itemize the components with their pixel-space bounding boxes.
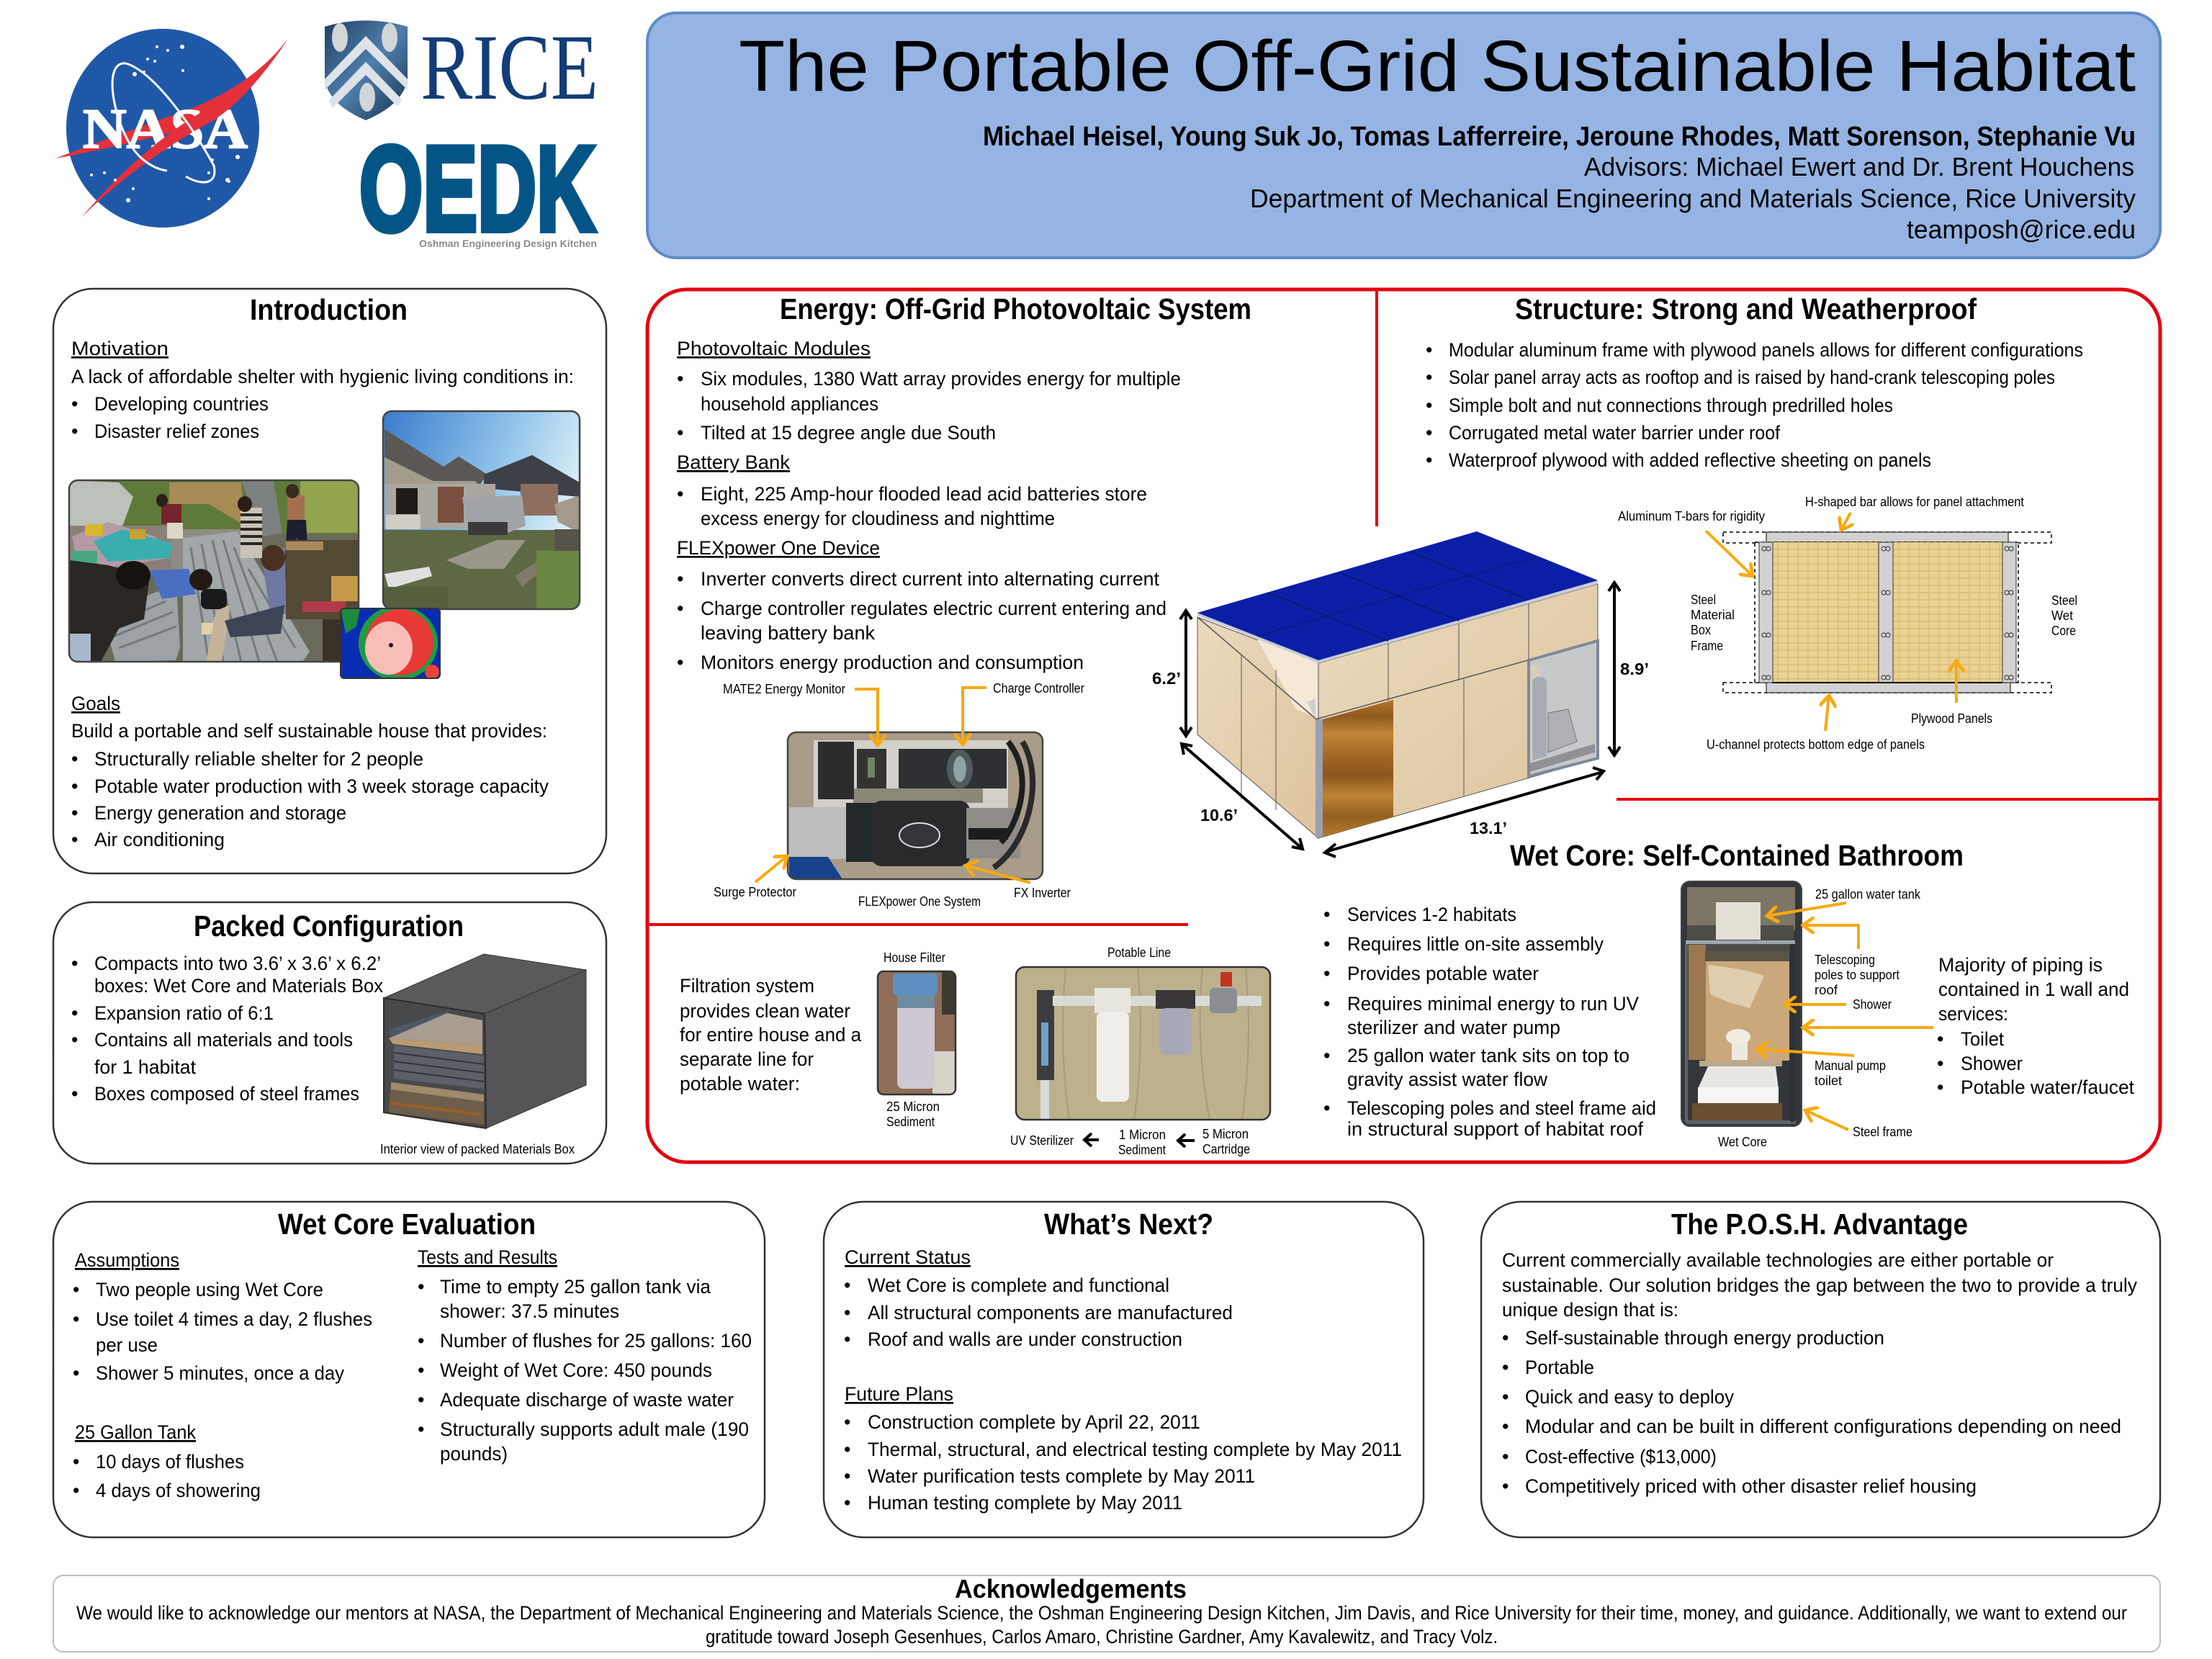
- future plans: •: [844, 1465, 850, 1487]
- structure bullets: Corrugated metal water barrier under roof: [1449, 422, 1780, 444]
- wet core callout labels: Steel frame: [1853, 1125, 1912, 1139]
- advisors and affiliation: teamposh@rice.edu: [1907, 215, 2136, 244]
- heading: Packed Configuration: Packed Configuration: [194, 909, 464, 943]
- structure bullets: •: [1426, 395, 1432, 416]
- wet core callout labels: 25 gallon water tank: [1815, 887, 1921, 902]
- diagram arrows: [1706, 513, 1956, 731]
- column: assumptions and tank: Two people using Wet Core: [96, 1279, 323, 1300]
- goals text: •: [71, 748, 78, 770]
- label: potable line stages with arrows: Sediment: [1118, 1143, 1166, 1157]
- energy text: Six modules, 1380 Watt array provides energy for multiple: [701, 368, 1181, 390]
- panel: Introduction: [53, 289, 606, 873]
- advantage text: sustainable. Our solution bridges the gap between the two to provide a truly: [1502, 1274, 2137, 1296]
- energy callout labels: Surge Protector: [714, 885, 796, 899]
- photo: house filter: [878, 971, 956, 1094]
- filtration text: potable water:: [680, 1073, 800, 1094]
- diagram labels: Core: [2051, 624, 2076, 638]
- column: assumptions and tank: 4 days of showering: [96, 1480, 261, 1501]
- piping note: services:: [1938, 1003, 2008, 1025]
- column: tests and results: [418, 1246, 752, 1465]
- heading: Introduction: Introduction: [250, 293, 408, 326]
- wet core bullets: Provides potable water: [1347, 963, 1539, 984]
- piping note: contained in 1 wall and: [1938, 979, 2129, 1000]
- advantage text: •: [1502, 1357, 1509, 1378]
- wet core bullets: sterilizer and water pump: [1347, 1017, 1560, 1038]
- logo: NASA: NASA: [83, 97, 248, 160]
- energy text: •: [677, 483, 683, 505]
- advisors and affiliation: [1250, 152, 2136, 244]
- future plans: •: [844, 1411, 850, 1433]
- advisors and affiliation: Department of Mechanical Engineering and Materials Science, Rice University: [1250, 184, 2136, 213]
- diagram labels: H-shaped bar allows for panel attachment: [1805, 495, 2024, 509]
- label: Potable Line: Potable Line: [1107, 945, 1171, 960]
- heading: Wet Core Evaluation: Wet Core Evaluation: [278, 1208, 536, 1241]
- future plans: Thermal, structural, and electrical testing complete by May 2011: [868, 1439, 1402, 1460]
- current status: •: [844, 1274, 850, 1296]
- diagram: panel frame: [1723, 532, 2051, 693]
- goals text: [71, 693, 549, 850]
- energy text: Monitors energy production and consumption: [701, 652, 1084, 673]
- goals text: Structurally reliable shelter for 2 people: [94, 748, 423, 770]
- structure bullets: [1426, 339, 2083, 471]
- energy text: Tilted at 15 degree angle due South: [701, 422, 996, 444]
- logo: Rice shield and wordmark: RICE: [421, 16, 598, 120]
- current status: •: [844, 1302, 850, 1323]
- energy text: household appliances: [701, 393, 878, 415]
- piping note: •: [1937, 1053, 1943, 1074]
- column: assumptions and tank: •: [73, 1308, 79, 1330]
- structure bullets: Solar panel array acts as rooftop and is raised by hand-crank telescoping poles: [1449, 367, 2055, 388]
- packed bullets: Expansion ratio of 6:1: [94, 1002, 274, 1024]
- wet core callout labels: [1718, 887, 1921, 1149]
- goals text: •: [71, 829, 78, 850]
- energy text: [677, 338, 1181, 673]
- motivation text: •: [71, 393, 78, 415]
- packed bullets: Contains all materials and tools: [94, 1029, 353, 1051]
- advantage text: unique design that is:: [1502, 1299, 1678, 1321]
- piping note: [1937, 954, 2134, 1098]
- heading: Acknowledgements: Acknowledgements: [955, 1574, 1187, 1604]
- column: assumptions and tank: •: [73, 1480, 79, 1501]
- energy text: FLEXpower One Device: [677, 537, 880, 559]
- panel: Habitat systems (red frame): [647, 289, 2160, 1162]
- logo: OEDK: Oshman Engineering Design Kitchen: [419, 238, 597, 249]
- energy text: Charge controller regulates electric current entering and: [701, 598, 1166, 619]
- column: assumptions and tank: [73, 1249, 372, 1501]
- label: potable line stages with arrows: 5 Micron: [1202, 1127, 1249, 1141]
- filtration text: Filtration system: [680, 975, 814, 997]
- advantage text: [1502, 1249, 2137, 1497]
- section: Wet Core: [1323, 839, 2134, 1149]
- column: assumptions and tank: •: [73, 1451, 79, 1473]
- energy text: •: [677, 598, 683, 619]
- column: assumptions and tank: •: [73, 1279, 79, 1300]
- wet core bullets: in structural support of habitat roof: [1347, 1118, 1643, 1140]
- goals text: •: [71, 775, 78, 797]
- motivation text: •: [71, 421, 78, 442]
- current status: Current Status: [845, 1246, 971, 1268]
- energy text: excess energy for cloudiness and nighttime: [701, 508, 1055, 529]
- label: House Filter: House Filter: [884, 950, 945, 965]
- label: potable line stages with arrows: UV Sterilizer: [1010, 1133, 1074, 1148]
- diagram labels: Box: [1691, 623, 1711, 637]
- wet core bullets: [1323, 904, 1656, 1140]
- packed bullets: Boxes composed of steel frames: [94, 1083, 359, 1105]
- heading: What's Next: What’s Next?: [1044, 1208, 1213, 1241]
- column: tests and results: shower: 37.5 minutes: [440, 1300, 619, 1322]
- goals text: Goals: [71, 693, 120, 714]
- advantage text: Competitively priced with other disaster relief housing: [1525, 1475, 1977, 1497]
- dimension arrows and labels: 8.9’: [1620, 660, 1649, 678]
- advisors and affiliation: Advisors: Michael Ewert and Dr. Brent Houchens: [1584, 152, 2134, 181]
- filtration text: for entire house and a: [680, 1024, 862, 1046]
- future plans: Water purification tests complete by May 2011: [868, 1465, 1255, 1487]
- wet core callout labels: roof: [1815, 983, 1838, 997]
- goals text: Energy generation and storage: [94, 802, 346, 824]
- diagram labels: Steel: [2051, 593, 2077, 608]
- energy text: •: [677, 422, 683, 444]
- column: tests and results: Adequate discharge of waste water: [440, 1389, 734, 1411]
- piping note: •: [1937, 1028, 1943, 1050]
- advantage text: Cost-effective ($13,000): [1525, 1446, 1717, 1467]
- column: tests and results: Weight of Wet Core: 450 pounds: [440, 1359, 712, 1381]
- energy text: •: [677, 368, 683, 390]
- column: tests and results: pounds): [440, 1443, 508, 1465]
- advantage text: Quick and easy to deploy: [1525, 1386, 1734, 1408]
- energy callout labels: [714, 681, 1084, 909]
- diagram labels: Frame: [1691, 639, 1723, 653]
- packed bullets: •: [71, 953, 78, 974]
- column: assumptions and tank: 25 Gallon Tank: [75, 1421, 196, 1443]
- packed bullets: •: [71, 1029, 78, 1051]
- energy callout arrows: [755, 688, 1030, 883]
- future plans: Human testing complete by May 2011: [868, 1492, 1182, 1514]
- wet core callout labels: poles to support: [1815, 968, 1899, 982]
- advantage text: •: [1502, 1475, 1509, 1497]
- wet core bullets: Requires little on-site assembly: [1347, 933, 1604, 955]
- photo: destroyed house: [383, 411, 580, 609]
- advantage text: Modular and can be built in different configurations depending on need: [1525, 1416, 2121, 1437]
- wet core callout labels: Shower: [1853, 997, 1892, 1012]
- goals text: Potable water production with 3 week storage capacity: [94, 775, 549, 797]
- wet core bullets: •: [1323, 904, 1330, 925]
- wet core bullets: Telescoping poles and steel frame aid: [1347, 1097, 1656, 1119]
- motivation text: Disaster relief zones: [94, 421, 259, 442]
- diagram labels: Steel: [1691, 593, 1716, 607]
- wet core bullets: •: [1323, 963, 1330, 984]
- panel: The P.O.S.H. Advantage: [1481, 1202, 2160, 1537]
- section: Energy: [677, 292, 1251, 909]
- panel: Acknowledgements: [53, 1574, 2160, 1652]
- energy callout labels: Charge Controller: [993, 681, 1084, 696]
- structure bullets: Modular aluminum frame with plywood panels allows for different configurations: [1449, 339, 2083, 361]
- current status: •: [844, 1328, 850, 1350]
- dimension arrows and labels: [1152, 583, 1649, 857]
- current status: All structural components are manufactured: [868, 1302, 1233, 1323]
- column: assumptions and tank: 10 days of flushes: [96, 1451, 244, 1473]
- piping note: •: [1937, 1076, 1943, 1098]
- wet core bullets: •: [1323, 993, 1330, 1015]
- diagram labels: Plywood Panels: [1911, 711, 1992, 726]
- panel: What's Next: [824, 1202, 1424, 1537]
- label: 25 Micron Sediment: 25 Micron: [886, 1100, 940, 1114]
- diagram labels: Wet: [2051, 608, 2073, 623]
- future plans: Future Plans: [845, 1383, 953, 1405]
- filtration text: provides clean water: [680, 1000, 850, 1022]
- energy text: •: [677, 652, 683, 673]
- advantage text: •: [1502, 1446, 1509, 1467]
- wet core bullets: •: [1323, 1097, 1330, 1119]
- piping note: Shower: [1961, 1053, 2023, 1074]
- column: assumptions and tank: Shower 5 minutes, once a day: [96, 1362, 344, 1384]
- current status: Roof and walls are under construction: [868, 1328, 1182, 1350]
- heading: Structure: Structure: Strong and Weatherproof: [1515, 292, 1977, 325]
- packed bullets: •: [71, 1083, 78, 1105]
- wet core bullets: •: [1323, 933, 1330, 955]
- goals text: Air conditioning: [94, 829, 225, 850]
- dimension arrows and labels: 6.2’: [1152, 669, 1181, 688]
- column: assumptions and tank: Use toilet 4 times a day, 2 flushes: [96, 1308, 372, 1330]
- filtration text: [680, 975, 862, 1094]
- column: assumptions and tank: Assumptions: [75, 1249, 179, 1271]
- advantage text: •: [1502, 1327, 1509, 1349]
- photo: people searching debris: [69, 480, 359, 662]
- panel: Wet Core Evaluation: [53, 1202, 765, 1537]
- piping note: Majority of piping is: [1938, 954, 2103, 976]
- energy callout labels: FX Inverter: [1014, 886, 1071, 900]
- column: tests and results: Structurally supports adult male (190: [440, 1419, 749, 1440]
- column: assumptions and tank: •: [73, 1362, 79, 1384]
- logo: NASA: [55, 29, 287, 228]
- logo: OEDK: OEDK: [359, 121, 595, 256]
- photo: potable line: [1016, 967, 1270, 1120]
- photo: wet core: [1681, 881, 1802, 1126]
- wet core bullets: 25 gallon water tank sits on top to: [1347, 1045, 1629, 1066]
- heading: Wet Core: Wet Core: Self-Contained Bathroom: [1510, 839, 1964, 872]
- label: potable line stages with arrows: Cartridge: [1202, 1142, 1250, 1156]
- structure bullets: Waterproof plywood with added reflective sheeting on panels: [1449, 449, 1931, 471]
- acknowledgement text: [76, 1602, 2127, 1647]
- label: 25 Micron Sediment: [886, 1100, 940, 1129]
- wet core bullets: •: [1323, 1045, 1330, 1066]
- logo: Rice shield and wordmark: [325, 16, 598, 120]
- packed bullets: •: [71, 1002, 78, 1024]
- future plans: •: [844, 1492, 850, 1514]
- photo: FLEXpower system: [788, 732, 1043, 879]
- energy callout labels: FLEXpower One System: [858, 894, 981, 909]
- future plans: Construction complete by April 22, 2011: [868, 1411, 1200, 1433]
- future plans: •: [844, 1439, 850, 1460]
- piping note: Toilet: [1961, 1028, 2004, 1050]
- authors: Michael Heisel, Young Suk Jo, Tomas Lafferreire, Jeroune Rhodes, Matt Sorenson, Stephanie Vu: [983, 122, 2136, 152]
- caption: materials box: Interior view of packed Materials Box: [380, 1142, 575, 1156]
- diagram labels: [1618, 495, 2077, 752]
- structure bullets: •: [1426, 449, 1432, 471]
- section: Filtration: [680, 945, 1270, 1157]
- filtration text: separate line for: [680, 1048, 814, 1070]
- packed bullets: [71, 953, 383, 1105]
- column: tests and results: •: [418, 1419, 424, 1440]
- wet core callout labels: toilet: [1815, 1074, 1842, 1088]
- current status: Wet Core is complete and functional: [868, 1274, 1169, 1296]
- label: 25 Micron Sediment: Sediment: [886, 1115, 935, 1129]
- wet core callout labels: Telescoping: [1815, 953, 1875, 967]
- heading: The P.O.S.H. Advantage: The P.O.S.H. Advantage: [1671, 1208, 1968, 1241]
- advantage text: •: [1502, 1416, 1509, 1437]
- label: potable line stages with arrows: [1010, 1127, 1250, 1157]
- photo: hurricane satellite: [341, 606, 440, 680]
- column: tests and results: •: [418, 1276, 424, 1298]
- current status: [844, 1246, 1233, 1350]
- wet core callout labels: Wet Core: [1718, 1135, 1767, 1149]
- structure bullets: •: [1426, 367, 1432, 388]
- energy text: Battery Bank: [677, 451, 791, 473]
- wet core bullets: Requires minimal energy to run UV: [1347, 993, 1639, 1015]
- motivation text: Developing countries: [94, 393, 269, 415]
- wet core bullets: Services 1-2 habitats: [1347, 904, 1516, 925]
- column: tests and results: Tests and Results: [418, 1246, 557, 1268]
- dimension arrows and labels: 10.6’: [1200, 806, 1238, 824]
- wet core callout labels: Manual pump: [1815, 1058, 1886, 1073]
- advantage text: Current commercially available technologies are either portable or: [1502, 1249, 2054, 1271]
- column: tests and results: •: [418, 1330, 424, 1352]
- energy text: leaving battery bank: [701, 622, 875, 644]
- column: tests and results: •: [418, 1389, 424, 1411]
- goals text: •: [71, 802, 78, 824]
- heading: Energy: Energy: Off-Grid Photovoltaic System: [780, 292, 1251, 325]
- wet core callout arrows: [1757, 903, 1933, 1130]
- motivation text: A lack of affordable shelter with hygienic living conditions in:: [71, 366, 574, 387]
- column: tests and results: Number of flushes for 25 gallons: 160: [440, 1330, 752, 1352]
- energy text: Eight, 225 Amp-hour flooded lead acid batteries store: [701, 483, 1147, 505]
- logo: OEDK: [359, 121, 597, 256]
- energy text: •: [677, 568, 683, 590]
- packed bullets: Compacts into two 3.6’ x 3.6’ x 6.2’: [94, 953, 381, 974]
- diagram labels: U-channel protects bottom edge of panels: [1707, 737, 1925, 752]
- title banner: [647, 13, 2160, 258]
- wet core bullets: gravity assist water flow: [1347, 1069, 1547, 1090]
- motivation text: [71, 338, 574, 442]
- energy text: Photovoltaic Modules: [677, 338, 871, 359]
- advantage text: Self-sustainable through energy production: [1525, 1327, 1884, 1349]
- advantage text: •: [1502, 1386, 1509, 1408]
- structure bullets: Simple bolt and nut connections through predrilled holes: [1449, 395, 1893, 416]
- diagram labels: Aluminum T-bars for rigidity: [1618, 509, 1765, 523]
- motivation text: Motivation: [71, 338, 168, 359]
- illustration: materials box: [384, 954, 586, 1128]
- column: tests and results: Time to empty 25 gallon tank via: [440, 1276, 711, 1298]
- acknowledgement text: gratitude toward Joseph Gesenhues, Carlos Amaro, Christine Gardner, Amy Kavalewitz, and Tracy Volz.: [706, 1626, 1498, 1647]
- column: tests and results: •: [418, 1359, 424, 1381]
- future plans: [844, 1383, 1402, 1514]
- packed bullets: boxes: Wet Core and Materials Box: [94, 975, 383, 997]
- structure bullets: •: [1426, 422, 1432, 444]
- piping note: Potable water/faucet: [1961, 1076, 2134, 1098]
- goals text: Build a portable and self sustainable house that provides:: [71, 720, 547, 742]
- diagram labels: Material: [1691, 608, 1735, 622]
- column: assumptions and tank: per use: [96, 1334, 158, 1356]
- dimension arrows and labels: 13.1’: [1470, 819, 1507, 837]
- illustration: habitat 3D model: [1197, 531, 1598, 838]
- structure bullets: •: [1426, 339, 1432, 361]
- packed bullets: for 1 habitat: [94, 1056, 196, 1078]
- energy callout labels: MATE2 Energy Monitor: [723, 682, 845, 696]
- energy text: Inverter converts direct current into alternating current: [701, 568, 1159, 590]
- section: Structure: [1426, 292, 2083, 752]
- label: potable line stages with arrows: 1 Micron: [1119, 1128, 1166, 1142]
- panel: Packed Configuration: [53, 902, 606, 1164]
- advantage text: Portable: [1525, 1357, 1594, 1378]
- title: The Portable Off-Grid Sustainable Habitat: [739, 26, 2136, 107]
